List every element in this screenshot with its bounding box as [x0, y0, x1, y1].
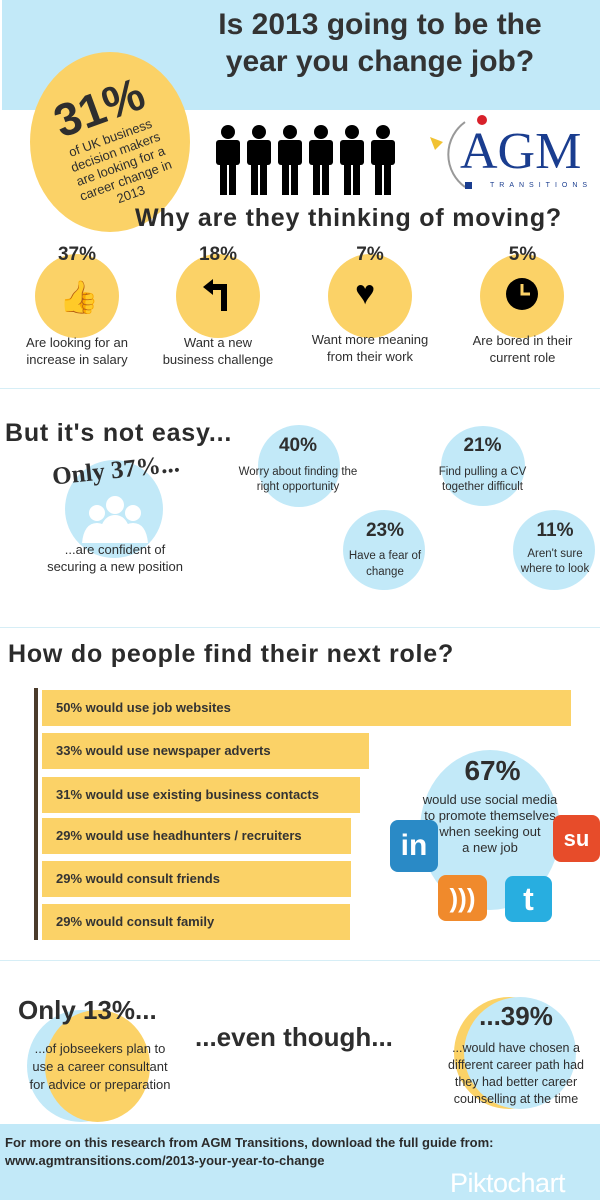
callout: only 13%: use a career consultant	[32, 1059, 168, 1074]
bubble 21%	[439, 426, 526, 506]
bubble 40%: Worry about finding the	[239, 466, 357, 478]
header band	[2, 0, 600, 110]
callout: 39%: they had better career	[455, 1075, 577, 1089]
bubble 40%	[238, 425, 357, 507]
reason 7%: Want more meaning from their work	[312, 332, 428, 364]
icon: twitter	[505, 876, 552, 922]
text: 50% would use job websites	[56, 700, 231, 715]
reason 18%: business challenge	[163, 352, 273, 367]
callout: 67% social media: 67%	[464, 755, 521, 786]
reason 5%	[472, 244, 572, 365]
bar chart	[34, 688, 38, 940]
callout: only 37%: securing a new position	[47, 559, 183, 574]
callout: only 13%: for advice or preparation	[30, 1077, 170, 1092]
callout: 31% circle: 31%	[47, 67, 151, 147]
callout: only 37%	[47, 450, 183, 574]
callout: 39%: ...would have chosen a	[452, 1041, 580, 1055]
reason 5%: 5%	[509, 244, 536, 265]
text: 29% would consult friends	[56, 871, 220, 886]
callout: 39%: ...39%	[479, 1001, 553, 1031]
text: even though: ...even though...	[195, 1022, 393, 1052]
footer band: For more on this research from AGM Transitions, download the full guide from:	[5, 1135, 494, 1150]
callout: 67% social media: when seeking out	[439, 824, 541, 839]
bubble 21%: together difficult	[442, 481, 523, 493]
reason 7%: ♥	[355, 274, 375, 312]
callout: 67% social media: would use social media	[423, 792, 557, 807]
icon: people	[216, 125, 395, 195]
icon: linkedin: in	[401, 829, 427, 862]
reason 5%: Are bored in their current role	[473, 333, 572, 365]
heading: not easy: But it's not easy...	[5, 419, 232, 447]
reason 18%	[163, 244, 273, 367]
callout: 39%: counselling at the time	[454, 1092, 578, 1106]
piktochart mark: Piktochart	[450, 1168, 565, 1198]
callout: only 13%	[18, 995, 170, 1122]
callout: 39%	[448, 997, 584, 1109]
footer band	[0, 1124, 600, 1200]
text: 29% would consult family	[56, 914, 214, 929]
callout: 31% circle	[30, 52, 190, 232]
bubble 23%: 23%	[366, 520, 404, 541]
callout: only 37%: Only 37%...	[51, 450, 181, 491]
callout: 39%: different career path had	[448, 1058, 584, 1072]
reason 18%: 18%	[199, 244, 237, 265]
callout: only 13%: Only 13%...	[18, 995, 157, 1025]
bubble 23%	[343, 510, 425, 590]
reason 7%	[312, 244, 428, 364]
reason 7%: 7%	[356, 244, 384, 265]
callout: 67% social media: a new job	[462, 840, 518, 855]
bubble 21%: 21%	[463, 435, 502, 456]
heading: why moving: Why are they thinking of moving?	[135, 204, 562, 232]
text: 33% would use newspaper adverts	[56, 743, 271, 758]
bubble 40%: right opportunity	[257, 481, 339, 493]
callout: only 37%: ...are confident of	[65, 542, 165, 557]
reason 37%: 37%	[58, 244, 96, 265]
bubble 11%: Aren't sure	[527, 548, 583, 560]
bubble 21%: Find pulling a CV	[439, 466, 526, 478]
bubble 11%	[513, 510, 595, 590]
callout: 67% social media	[390, 750, 600, 922]
bubble 11%: 11%	[536, 520, 573, 541]
text: 31% would use existing business contacts	[56, 787, 319, 802]
icon: linkedin	[390, 820, 438, 872]
icon: stumbleupon: su	[564, 826, 589, 851]
callout: 67% social media: to promote themselves	[424, 808, 556, 823]
callout: 31% circle: are looking for a	[74, 143, 167, 189]
footer band: www.agmtransitions.com/2013-your-year-to-change	[5, 1153, 325, 1168]
callout: 31% circle: 2013	[115, 182, 147, 206]
icon: rss: )))	[450, 883, 475, 913]
text: 29% would use headhunters / recruiters	[56, 828, 302, 843]
title: Is 2013 going to be the year you change job?	[218, 8, 542, 78]
reason 18%: Want a new	[184, 335, 252, 350]
bubble 23%: change	[366, 566, 404, 578]
callout: 31% circle: decision makers	[69, 129, 162, 175]
reason 37%: Are looking for an increase in salary	[26, 335, 128, 367]
logo: AGM Transitions	[430, 115, 592, 189]
bubble 11%: where to look	[521, 563, 589, 575]
reason 37%: 👍	[59, 279, 99, 315]
bubble 40%: 40%	[279, 435, 317, 456]
logo: AGM Transitions: TRANSITIONS	[490, 182, 592, 189]
icon: twitter: t	[523, 881, 534, 917]
icon: stumbleupon	[553, 815, 600, 862]
heading: find next role: How do people find their next role?	[8, 640, 454, 668]
panel: reasons	[26, 244, 572, 367]
icon: rss	[438, 875, 487, 921]
callout: 31% circle: of UK business	[67, 116, 154, 160]
reason 37%	[26, 244, 128, 367]
callout: only 13%: ...of jobseekers plan to	[35, 1041, 165, 1056]
bubble 23%: Have a fear of	[349, 550, 421, 562]
callout: 31% circle: career change in	[78, 156, 174, 204]
logo: AGM Transitions: AGM	[460, 123, 581, 180]
